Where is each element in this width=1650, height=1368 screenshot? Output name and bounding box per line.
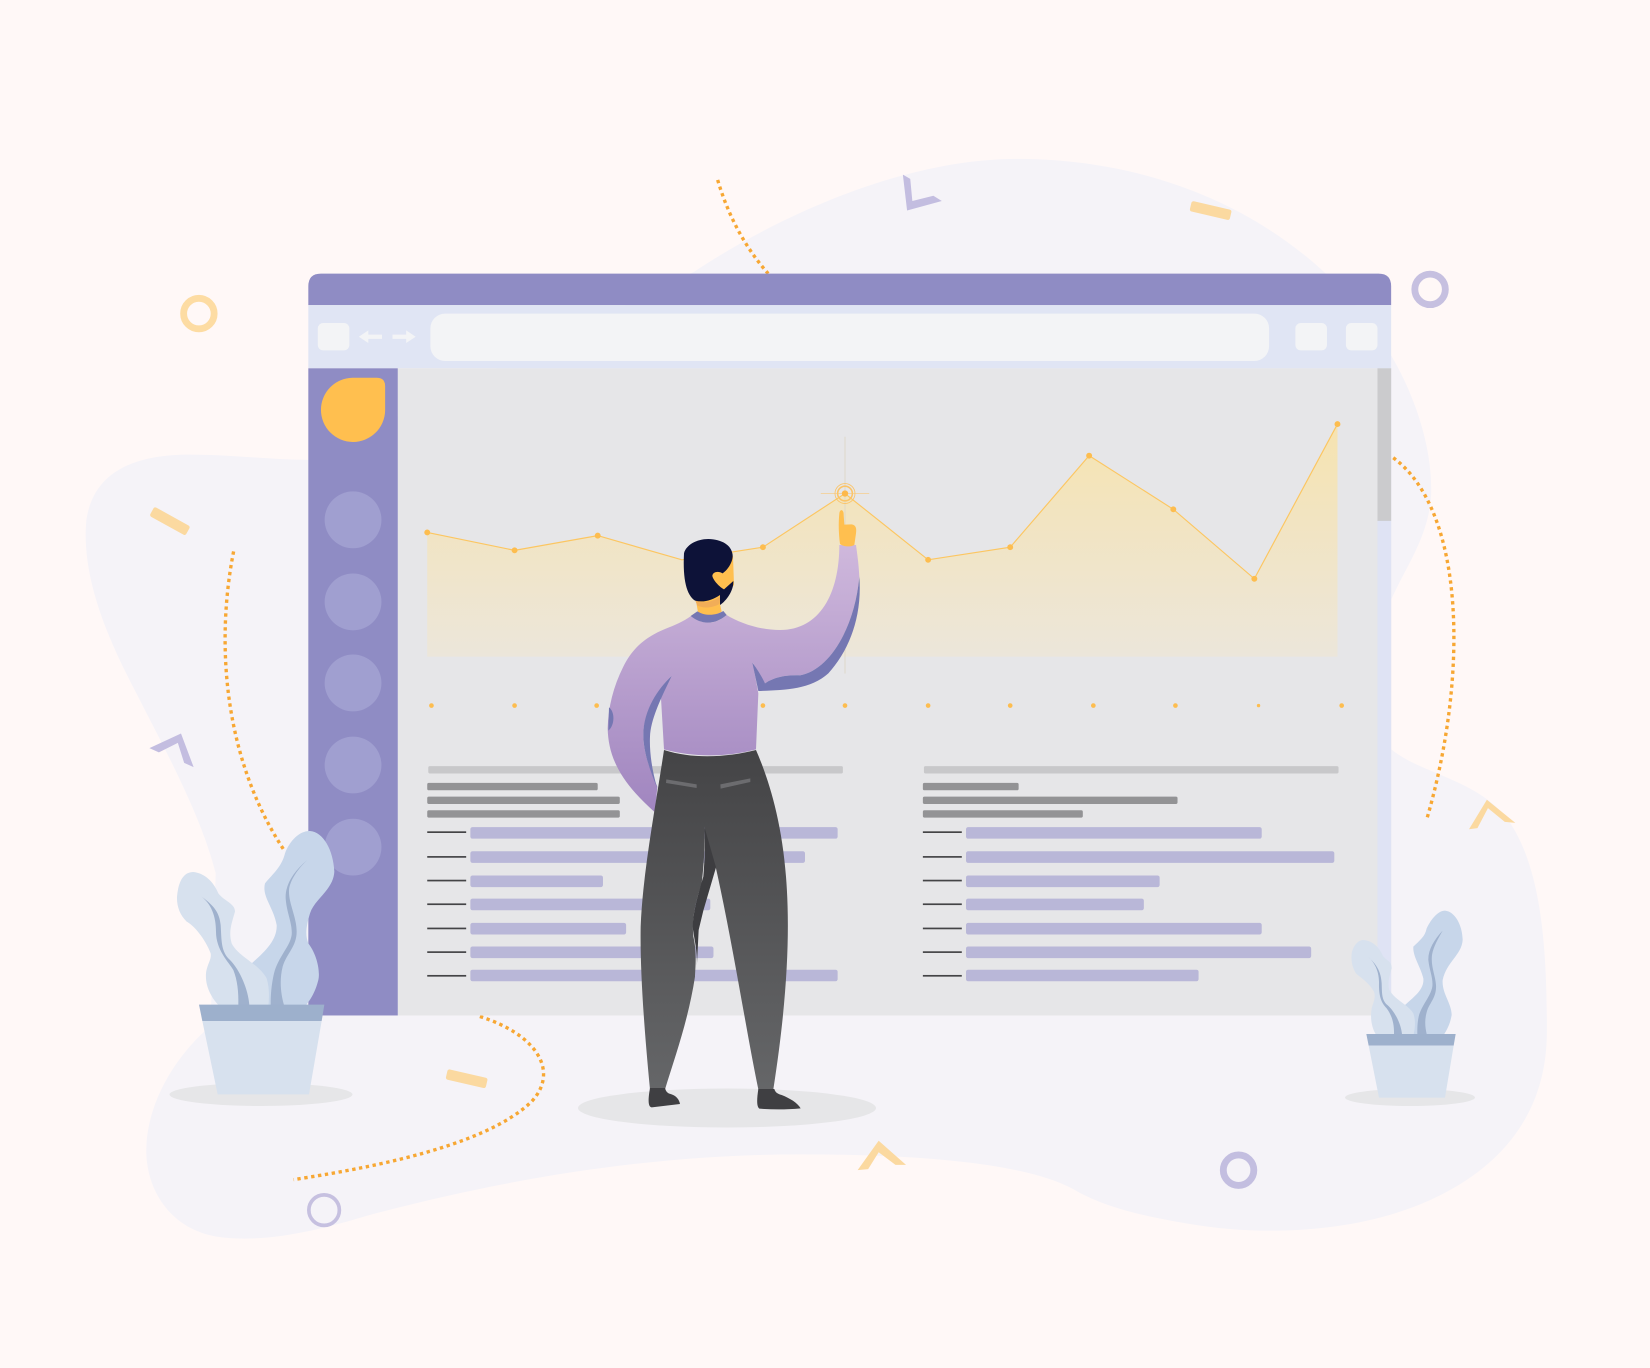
sidebar xyxy=(308,368,398,1015)
pot rim xyxy=(1366,1034,1456,1046)
ring: bottom left xyxy=(309,1195,339,1225)
chevron: left xyxy=(149,733,194,767)
inner leg shadow xyxy=(693,827,716,970)
dotted line: bottom xyxy=(294,1017,544,1180)
shadow: left plant xyxy=(170,1083,352,1106)
hair xyxy=(684,539,733,605)
chevron: top xyxy=(903,175,942,210)
chevron: bottom xyxy=(858,1141,906,1170)
sweater shading xyxy=(608,577,860,788)
pants xyxy=(641,750,788,1089)
back leaf xyxy=(252,831,334,1007)
pot body xyxy=(202,1021,322,1094)
line chart xyxy=(424,421,1344,708)
background blob xyxy=(86,159,1547,1239)
shadow: right plant xyxy=(1345,1089,1475,1106)
dash: top xyxy=(1189,201,1232,220)
hand xyxy=(839,510,856,546)
pot body xyxy=(1369,1046,1454,1098)
legs xyxy=(641,750,801,1109)
sweater xyxy=(608,545,859,812)
dash: bottom xyxy=(446,1069,488,1088)
chevron: right xyxy=(1469,800,1515,829)
shoes xyxy=(649,1088,801,1109)
front leaf vein xyxy=(199,895,249,1005)
content area xyxy=(398,368,1391,1015)
torso and arms xyxy=(608,510,860,812)
dash: left xyxy=(149,507,190,536)
data point target xyxy=(821,437,869,673)
toolbar xyxy=(308,305,1391,368)
shadow: person xyxy=(578,1088,876,1128)
ring: orange xyxy=(184,298,214,329)
front leaf vein xyxy=(1367,956,1402,1034)
dotted line: top xyxy=(718,180,768,274)
scrollbar xyxy=(1377,368,1391,1015)
neck and face xyxy=(696,556,734,616)
plant: left xyxy=(177,831,334,1094)
neck shadow xyxy=(695,596,721,607)
person xyxy=(608,510,860,1109)
back leaf vein xyxy=(1417,931,1443,1034)
ring: top right xyxy=(1415,274,1445,305)
dotted line: left xyxy=(225,551,284,850)
ring: bottom right xyxy=(1223,1155,1254,1185)
back leaf xyxy=(1405,911,1463,1036)
dotted line: right xyxy=(1393,458,1454,819)
pockets xyxy=(666,778,750,789)
title bar xyxy=(308,274,1391,305)
pot rim xyxy=(199,1005,324,1021)
front leaf xyxy=(1351,940,1415,1036)
text column: right xyxy=(923,766,1339,981)
text column: left xyxy=(427,766,843,981)
plant: right xyxy=(1351,911,1463,1098)
collar xyxy=(691,611,727,623)
back leaf vein xyxy=(271,860,307,1005)
front leaf xyxy=(177,872,269,1007)
browser window xyxy=(308,274,1391,1015)
